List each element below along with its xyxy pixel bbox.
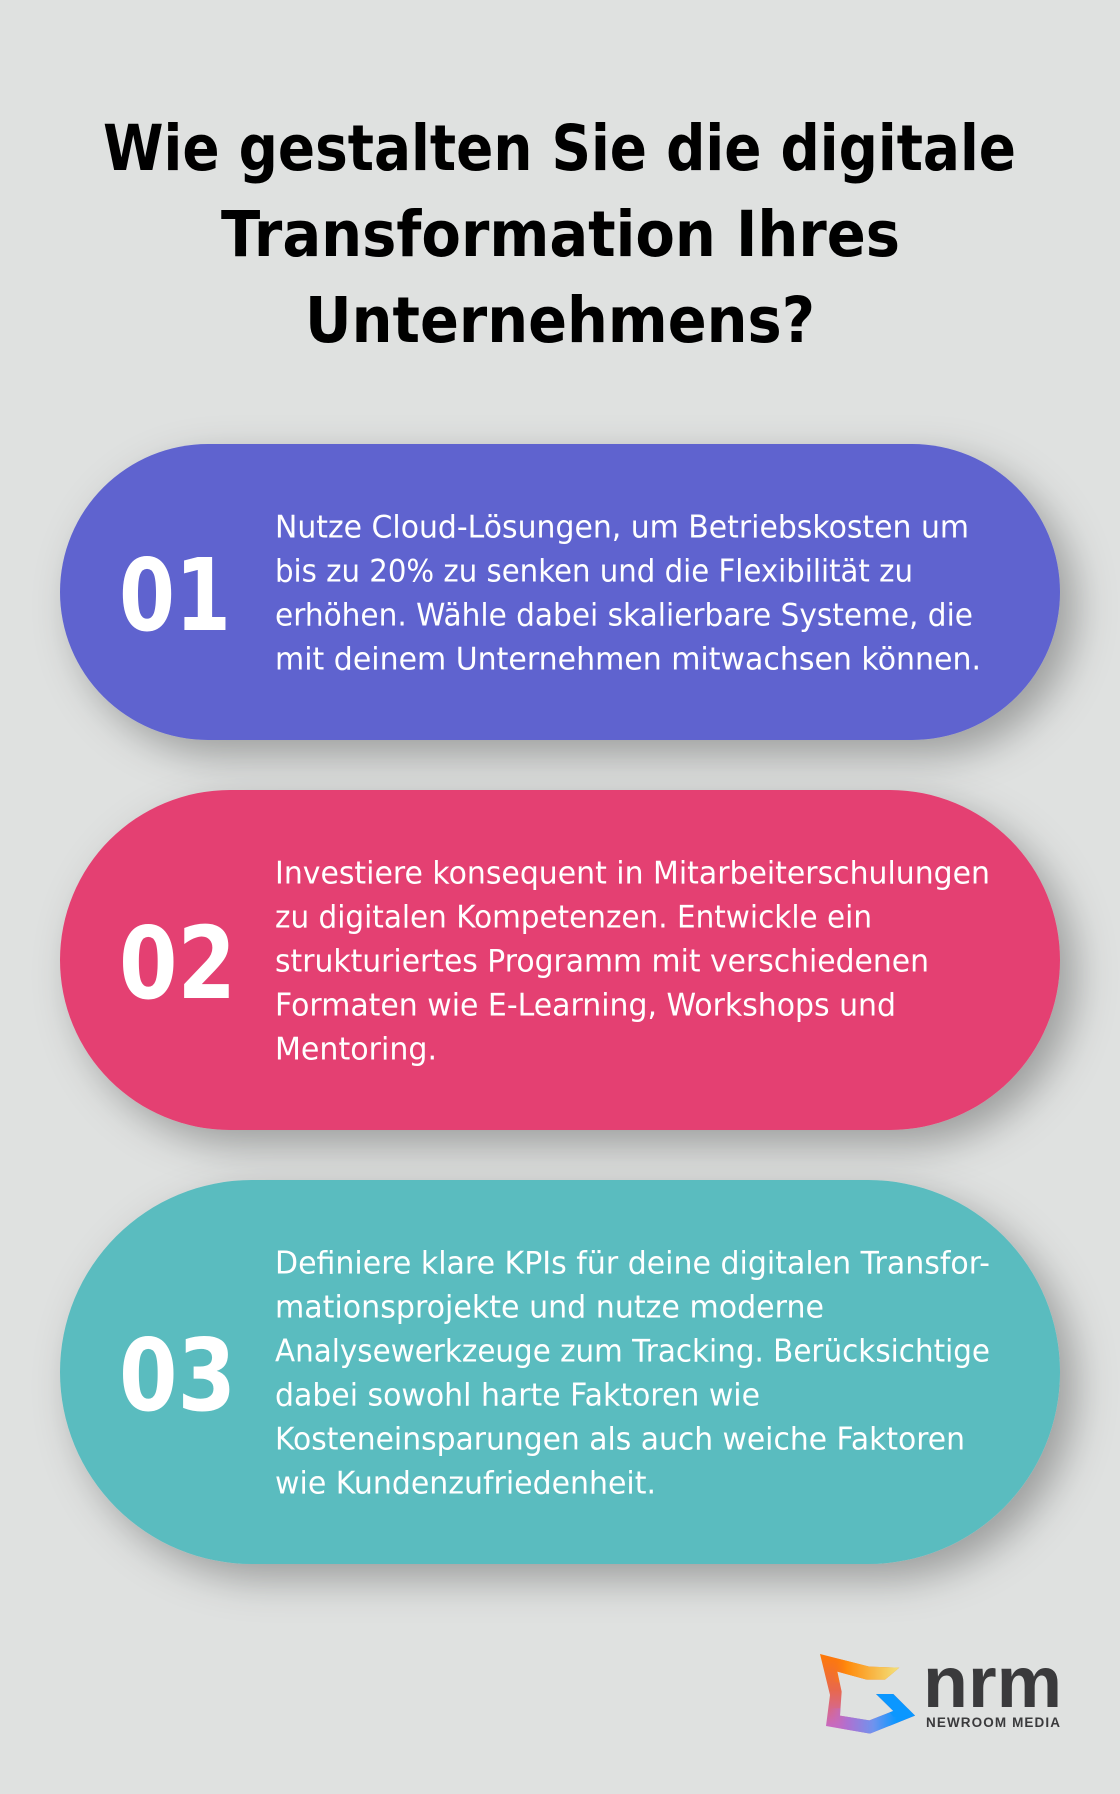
icon: logo mark bbox=[820, 1654, 915, 1734]
number 02: 02 bbox=[119, 905, 236, 1022]
text: step 03 bbox=[275, 1246, 990, 1502]
text: step 03: wie Kundenzufriedenheit. bbox=[275, 1466, 656, 1502]
text: step 02 bbox=[275, 856, 990, 1068]
text: step 03: mationsprojekte und nutze moderne bbox=[275, 1290, 824, 1326]
title: Unternehmens? bbox=[305, 284, 815, 357]
title bbox=[103, 112, 1016, 357]
text: step 02: Mentoring. bbox=[275, 1032, 437, 1068]
text: step 02: Investiere konsequent in Mitarbeiterschulungen bbox=[275, 856, 990, 892]
text: step 03: Definiere klare KPIs für deine digitalen Transfor- bbox=[275, 1246, 990, 1282]
title: Transformation Ihres bbox=[221, 198, 900, 271]
text: step 03: Kosteneinsparungen als auch weiche Faktoren bbox=[275, 1422, 965, 1458]
wordmark nrm: nrm bbox=[923, 1643, 1062, 1723]
logo: Newroom Media bbox=[820, 1654, 1060, 1734]
text: step 01: bis zu 20% zu senken und die Flexibilität zu bbox=[275, 554, 913, 590]
text: step 02: Formaten wie E-Learning, Workshops und bbox=[275, 988, 896, 1024]
text: step 01: mit deinem Unternehmen mitwachsen können. bbox=[275, 642, 981, 678]
text: step 02: zu digitalen Kompetenzen. Entwickle ein bbox=[275, 900, 872, 936]
text: step 01 bbox=[275, 510, 981, 678]
text: step 03: dabei sowohl harte Faktoren wie bbox=[275, 1378, 760, 1414]
panel: step 01 bbox=[60, 444, 1060, 740]
number 03: 03 bbox=[119, 1317, 236, 1434]
panel: step 02 bbox=[60, 790, 1060, 1130]
number 01: 01 bbox=[119, 537, 231, 654]
wordmark Newroom Media: NEWROOM MEDIA bbox=[926, 1715, 1060, 1730]
text: step 03: Analysewerkzeuge zum Tracking. Berücksichtige bbox=[275, 1334, 990, 1370]
text: step 02: strukturiertes Programm mit verschiedenen bbox=[275, 944, 929, 980]
title: Wie gestalten Sie die digitale bbox=[103, 112, 1016, 185]
text: step 01: erhöhen. Wähle dabei skalierbare Systeme, die bbox=[275, 598, 973, 634]
panel: step 03 bbox=[60, 1180, 1060, 1564]
text: step 01: Nutze Cloud-Lösungen, um Betriebskosten um bbox=[275, 510, 969, 546]
